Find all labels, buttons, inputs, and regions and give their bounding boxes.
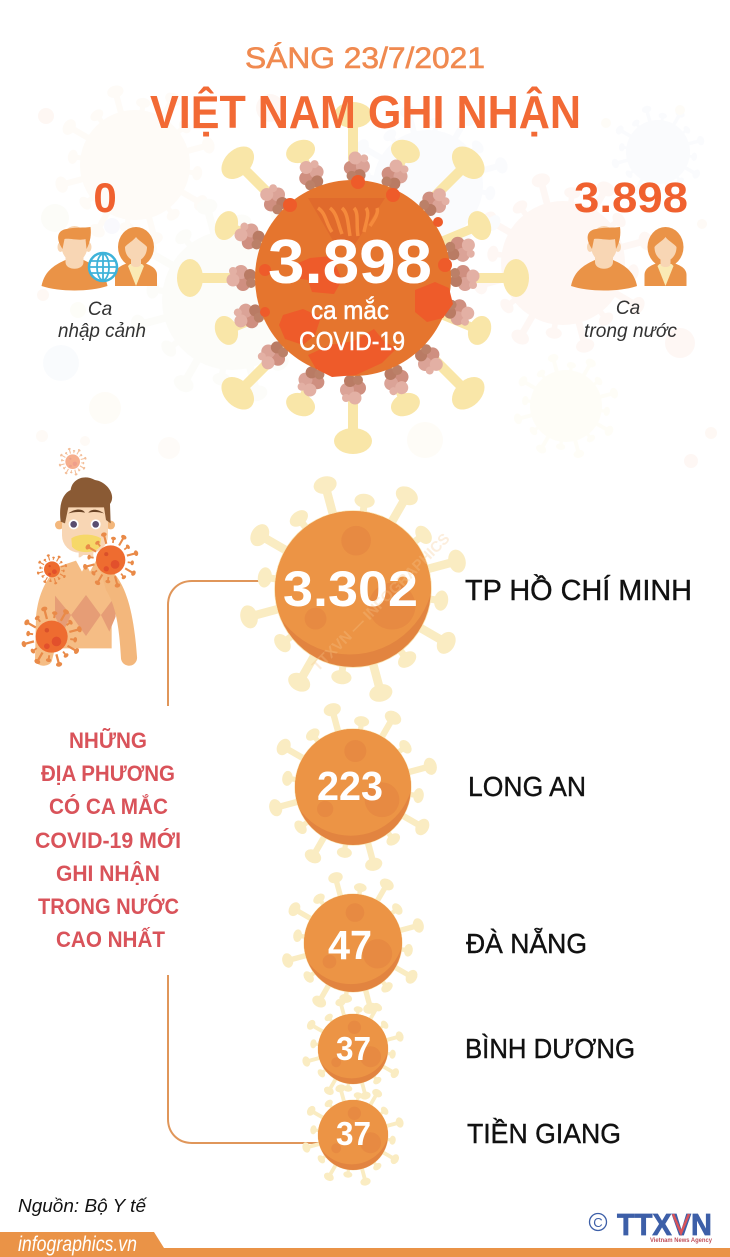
bubble: TP Ho Chi Minh: TTXVN — INFOGRAPHICS [309, 530, 453, 675]
bubble: Tien Giang [297, 1079, 409, 1191]
heading: localities: COVID-19 MỚI [35, 828, 181, 853]
icon: globe [89, 253, 117, 281]
red blotches [259, 175, 453, 377]
viruses on body [80, 530, 141, 590]
icon: man [42, 226, 108, 290]
number imported: 0 [93, 174, 117, 221]
sweater body [35, 561, 112, 666]
locality labels: TP HỒ CHÍ MINH [465, 573, 692, 607]
head [55, 521, 64, 529]
heading: localities: CÓ CA MẮC [49, 794, 168, 819]
collar and neck [79, 547, 93, 557]
total caption line 1: ca mắc [311, 295, 389, 325]
spike clumps [226, 151, 480, 404]
logo: TTXVN: TTXVN [617, 1207, 712, 1242]
source: Nguồn: Bộ Y tế [18, 1196, 148, 1216]
bubble: Da Nang: 47 [328, 922, 372, 968]
locality labels: BÌNH DƯƠNG [465, 1033, 635, 1064]
total number: 3.898 [268, 228, 432, 297]
mask [71, 535, 101, 552]
bubble: Long An: 223 [317, 763, 383, 809]
sweater diamonds [55, 595, 116, 636]
label imported line 1: Ca [88, 299, 112, 320]
bubble: Binh Duong: 37 [336, 1030, 371, 1067]
faint background viruses and dots [36, 77, 717, 468]
bubble: TP Ho Chi Minh [229, 465, 477, 713]
label domestic line 1: Ca [616, 298, 640, 319]
number domestic: 3.898 [574, 174, 688, 222]
total caption line 2: COVID-19 [299, 326, 405, 356]
main virus graphic with total [177, 102, 529, 454]
icon: woman [115, 227, 157, 286]
locality labels: TIỀN GIANG [467, 1118, 621, 1149]
locality labels: ĐÀ NẴNG [466, 927, 587, 959]
locality labels: LONG AN [468, 771, 586, 802]
subtitle: date: SÁNG 23/7/2021 [245, 42, 485, 75]
label domestic line 2: trong nước [584, 321, 677, 342]
top pattern of virus [308, 198, 385, 244]
eyes [69, 519, 79, 529]
heading: localities: NHỮNG [69, 728, 147, 753]
illustration: masked man with viruses [19, 446, 141, 670]
heading: localities: GHI NHẬN [56, 861, 160, 886]
panel: domestic cases [571, 174, 688, 342]
locality labels [465, 573, 692, 1149]
logo: TTXVN: Vietnam News Agency [650, 1237, 712, 1244]
virus body [255, 180, 451, 376]
panel: imported cases [42, 174, 157, 342]
icon: woman [644, 227, 686, 286]
bubble: TP Ho Chi Minh: 3.302 [283, 561, 418, 617]
bubble: Tien Giang: 37 [336, 1115, 371, 1152]
right arm [98, 563, 137, 666]
heading: localities: TRONG NƯỚC [38, 894, 179, 919]
bubble: Long An [261, 695, 445, 879]
heading: localities: CAO NHẤT [56, 927, 166, 952]
logo: TTXVN: C [593, 1215, 603, 1230]
title: VIỆT NAM GHI NHẬN [150, 86, 581, 138]
heading: localities [35, 728, 181, 952]
icon: man [571, 226, 637, 290]
bubble: Binh Duong [297, 993, 409, 1105]
bubble: Da Nang [275, 865, 431, 1021]
footer band: infographics.vn [18, 1233, 137, 1256]
virus spikes [177, 102, 529, 454]
heading: localities: ĐỊA PHƯƠNG [41, 761, 175, 786]
hair [60, 477, 112, 523]
label imported line 2: nhập cảnh [58, 321, 146, 342]
connector line [168, 581, 320, 1143]
footer band [0, 1232, 730, 1257]
